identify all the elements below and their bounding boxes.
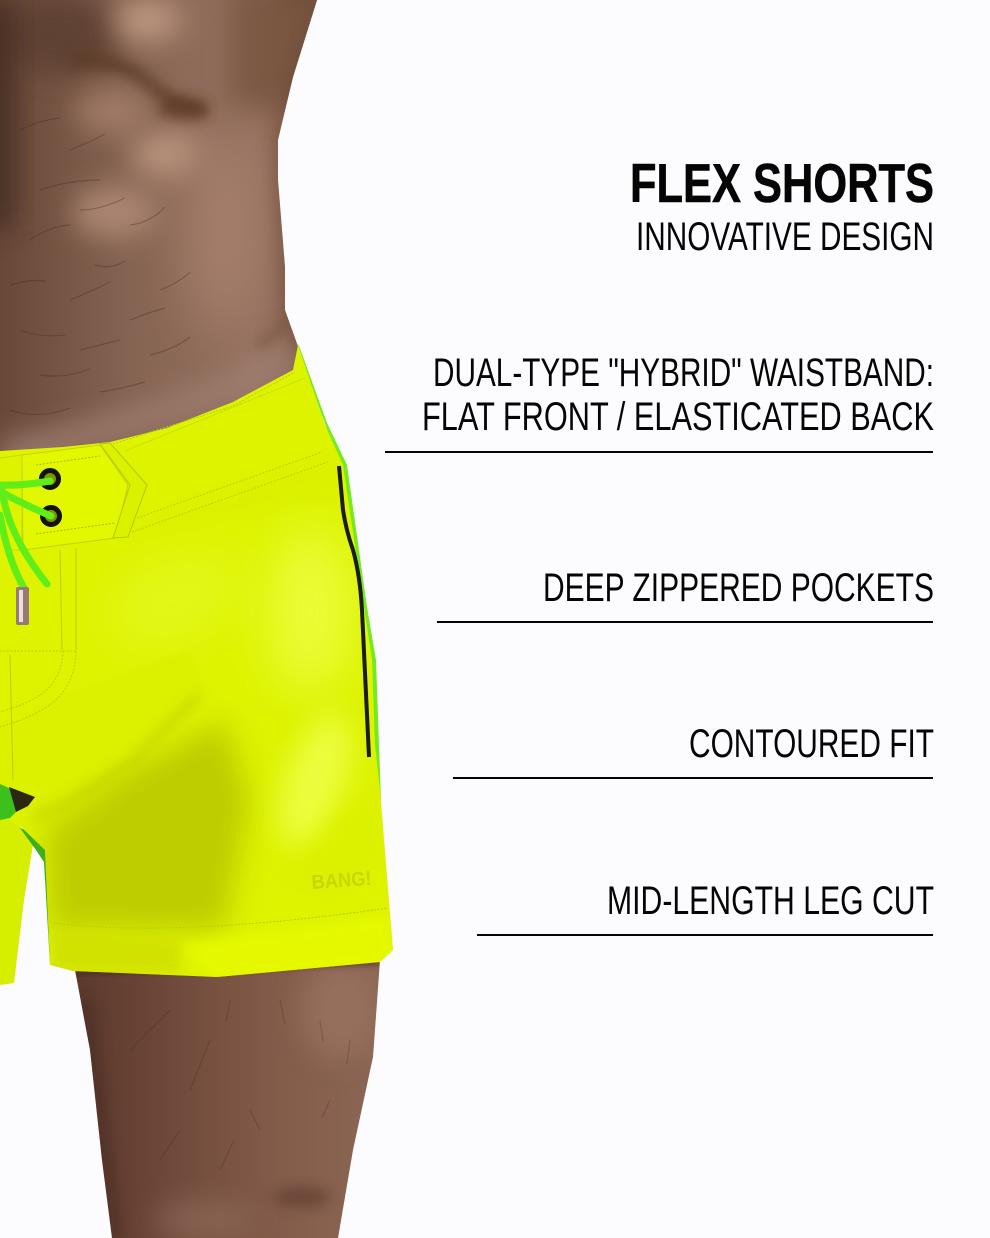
photo: crotch shadow bbox=[0, 784, 35, 820]
feature: waistband bbox=[385, 351, 934, 453]
icon: drawstring bbox=[0, 481, 51, 588]
waist tab bbox=[0, 443, 147, 550]
photo: left leg of shorts bbox=[0, 815, 33, 985]
icon: zipper pocket bbox=[339, 466, 369, 757]
hem stitch bbox=[53, 908, 388, 928]
fly placket bbox=[0, 548, 77, 780]
brand mark: BANG! bbox=[311, 868, 372, 894]
icon: cord aglet bbox=[16, 587, 29, 625]
icon: eyelets bbox=[42, 470, 60, 524]
waistband top stitching bbox=[113, 372, 295, 444]
photo: thigh bbox=[75, 960, 380, 1238]
photo: shorts bbox=[0, 345, 395, 982]
photo: green side panels bbox=[20, 343, 381, 965]
photo: torso bbox=[0, 0, 330, 480]
thigh fold bbox=[0, 650, 205, 817]
